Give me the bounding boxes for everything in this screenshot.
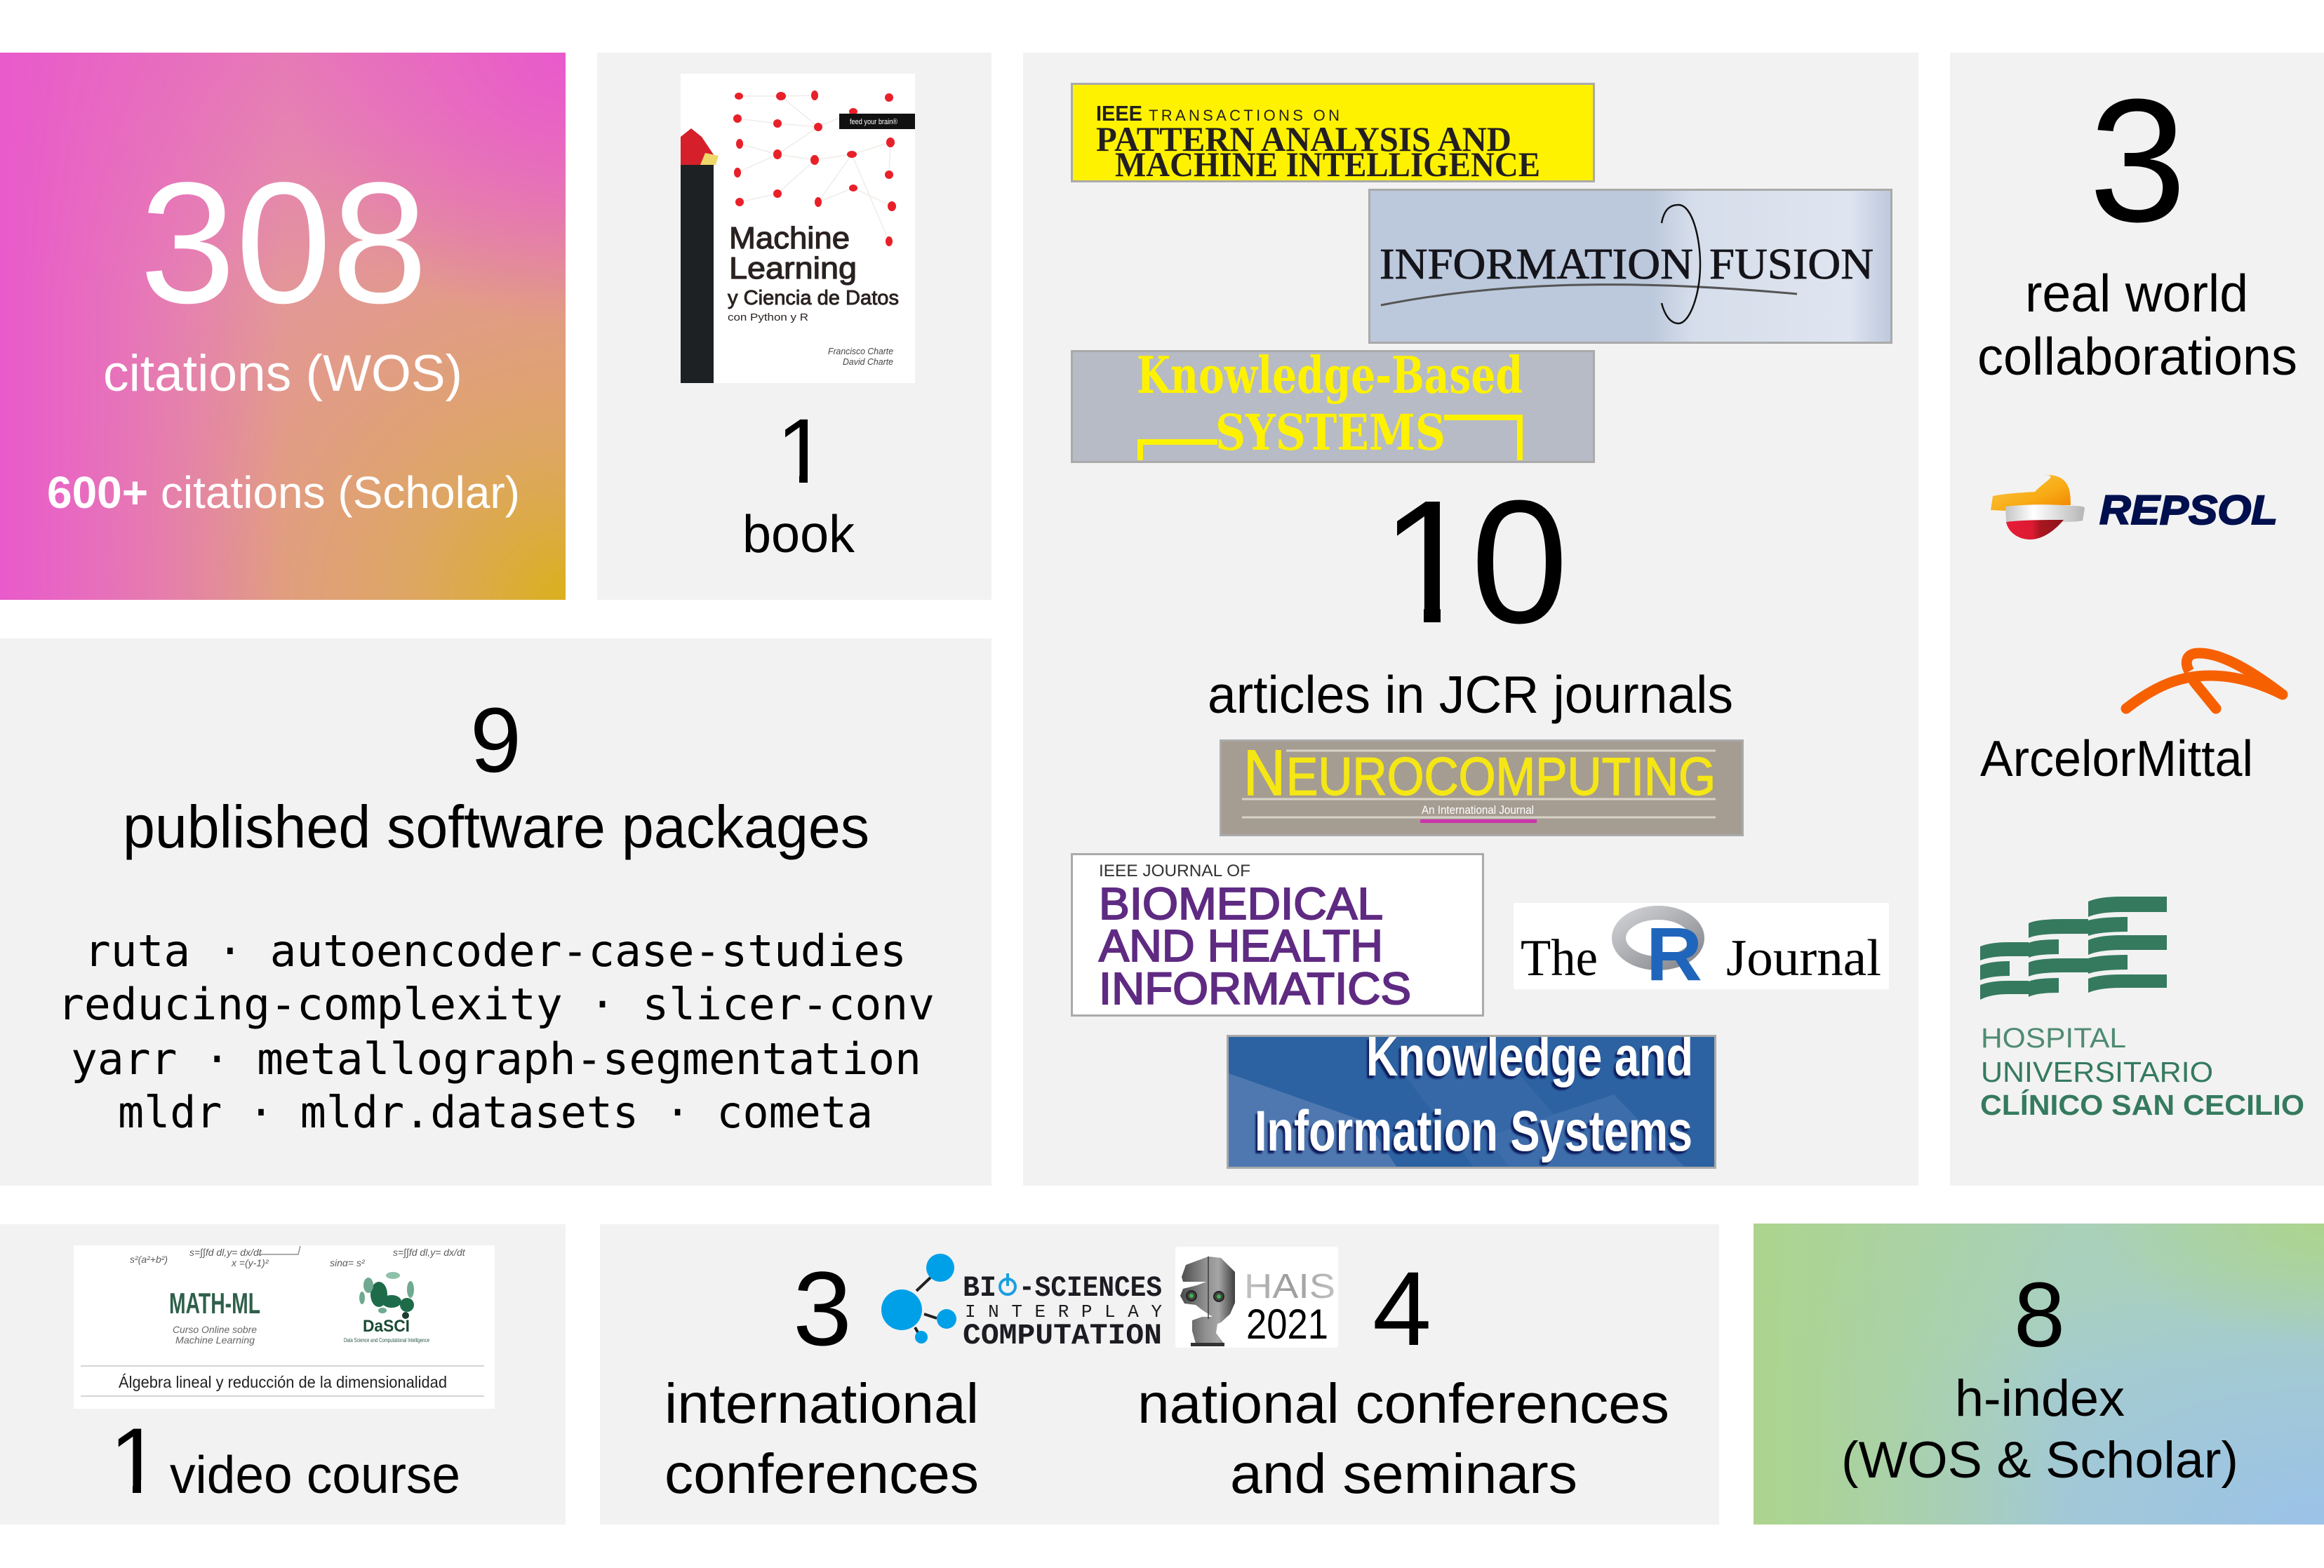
logo: Knowledge-Based Systems: SYSTEMS — [1215, 403, 1445, 462]
label: articles in JCR journals: articles in JCR journals — [1208, 665, 1733, 724]
label: h-index — [1841, 1370, 2238, 1489]
logo: IEEE TPAMI: MACHINE INTELLIGENCE — [1115, 145, 1540, 184]
video course thumbnail: DaSCI — [363, 1317, 410, 1336]
panel: real world collaborations — [1950, 53, 2324, 1186]
logo: Knowledge and Information Systems: Knowledge and — [1366, 1025, 1693, 1087]
label: citations WOS: citations (WOS) — [103, 345, 462, 402]
logo: Knowledge and Information Systems — [1228, 1025, 1715, 1167]
number: 1 book: 1 — [776, 399, 827, 502]
panel: journal articles — [1023, 53, 1918, 1186]
logo: Hospital San Cecilio: HOSPITAL — [1981, 1023, 2126, 1054]
logo: IEEE JBHI: BIOMEDICAL — [1099, 878, 1383, 929]
video course thumbnail: Álgebra lineal y reducción de la dimensionalidad — [119, 1373, 447, 1391]
book cover: Machine — [729, 221, 850, 255]
panel: h-index — [1754, 1224, 2324, 1525]
logo: The R Journal: R — [1646, 911, 1702, 996]
label: international conferences: international — [665, 1372, 979, 1435]
number: 3 international conferences: 3 — [793, 1249, 852, 1367]
number: 10 articles: 10 — [1380, 464, 1568, 659]
video course thumbnail: x =(y-1)² — [231, 1257, 269, 1268]
logo: IEEE JBHI: INFORMATICS — [1099, 963, 1411, 1014]
logo: HAIS 2021 — [1175, 1247, 1338, 1348]
logo: IEEE JBHI — [1072, 855, 1483, 1016]
logo: Repsol: REPSOL — [2099, 488, 2278, 533]
package list: yarr · metallograph-segmentation — [71, 1033, 921, 1085]
video course thumbnail: s²(a²+b²) — [130, 1254, 168, 1265]
logo: Bio-Sciences Interplay Computation: BI — [963, 1271, 996, 1305]
logo: Neurocomputing: EUROCOMPUTING — [1286, 747, 1716, 807]
logo: Knowledge-Based Systems: Knowledge-Based — [1137, 345, 1523, 405]
logo: Neurocomputing: An International Journal — [1422, 803, 1534, 817]
panel: software packages — [0, 638, 991, 1186]
label: book: book — [742, 504, 855, 563]
panel: book — [597, 53, 991, 600]
logo: Information Fusion: INFORMATION — [1380, 241, 1693, 288]
logo: IEEE TPAMI: IEEE — [1096, 101, 1142, 126]
book cover: y Ciencia de Datos — [728, 287, 899, 309]
video course thumbnail: sinα= s² — [330, 1257, 366, 1268]
logo: Hospital San Cecilio: UNIVERSITARIO — [1981, 1056, 2213, 1088]
label: real world collaborations — [1977, 264, 2297, 386]
video course thumbnail: s=∫∫fd dl,y= dx/dt — [393, 1247, 466, 1259]
video course thumbnail: Curso Online sobre — [173, 1324, 257, 1335]
heading: published software packages: published software packages — [123, 794, 869, 861]
book cover: Francisco Charte — [828, 346, 893, 356]
package list: ruta · autoencoder-case-studies — [84, 925, 907, 977]
package list: reducing-complexity · slicer-conv — [58, 979, 935, 1030]
logo: Bio-Sciences Interplay Computation: INTERPLAY — [965, 1301, 1162, 1322]
book cover: con Python y R — [728, 311, 808, 323]
logo: Hospital San Cecilio — [1980, 897, 2304, 1121]
book cover: feed your brain® — [850, 118, 897, 126]
logo: IEEE JBHI: IEEE JOURNAL OF — [1099, 862, 1250, 880]
logo: The R Journal: The — [1521, 930, 1598, 987]
number: 8 h-index: 8 — [2014, 1263, 2065, 1366]
video course thumbnail: s=∫∫fd dl,y= dx/dt — [189, 1247, 262, 1259]
label: video course: video course — [170, 1445, 460, 1504]
number: 1 video course: 1 — [109, 1409, 161, 1513]
logo: Information Fusion: FUSION — [1709, 241, 1874, 288]
logo: IEEE TPAMI: PATTERN ANALYSIS AND — [1096, 119, 1511, 159]
panel: conferences — [600, 1224, 1719, 1525]
label: international conferences: conferences — [665, 1442, 979, 1505]
logo: IEEE TPAMI: TRANSACTIONS ON — [1149, 107, 1340, 124]
logo: Neurocomputing: N — [1243, 737, 1285, 809]
label: h-index: (WOS & Scholar) — [1841, 1432, 2238, 1489]
number: 4 national conferences: 4 — [1373, 1249, 1431, 1367]
label: citations Scholar: 600+ citations (Scholar) — [47, 467, 520, 518]
label: real world collaborations: collaborations — [1977, 327, 2297, 386]
logo: Knowledge-Based Systems — [1072, 345, 1594, 462]
logo: Bio-Sciences Interplay Computation: COMPUTATION — [963, 1319, 1162, 1353]
book cover: Learning — [729, 251, 857, 286]
package list — [58, 925, 935, 1138]
logo: ArcelorMittal: ArcelorMittal — [1980, 731, 2253, 787]
label: real world collaborations: real world — [2025, 264, 2248, 323]
logo: HAIS 2021: HAIS — [1244, 1268, 1335, 1306]
label: international conferences — [665, 1372, 979, 1505]
book cover — [681, 74, 915, 383]
logo: The R Journal — [1514, 903, 1889, 996]
number: 3 collaborations: 3 — [2089, 62, 2186, 258]
logo: ArcelorMittal — [1980, 653, 2283, 787]
panel: citations — [0, 53, 566, 600]
video course thumbnail: Data Science and Computational Intelligence — [344, 1337, 429, 1343]
label: national conferences and seminars: national conferences — [1137, 1372, 1669, 1435]
logo: IEEE TPAMI — [1072, 84, 1594, 184]
logo: IEEE JBHI: AND HEALTH — [1099, 920, 1383, 971]
label: h-index: h-index — [1955, 1370, 2125, 1427]
label: national conferences and seminars — [1137, 1372, 1669, 1505]
book cover: David Charte — [843, 356, 893, 367]
panel: video course — [0, 1224, 566, 1525]
logo: Bio-Sciences Interplay Computation: -SCIENCES — [1019, 1271, 1162, 1305]
number: 308 citations: 308 — [140, 147, 427, 340]
video course thumbnail: MATH-ML — [169, 1287, 260, 1320]
package list: mldr · mldr.datasets · cometa — [118, 1087, 873, 1138]
logo: Neurocomputing — [1221, 737, 1743, 835]
video course thumbnail: Machine Learning — [175, 1334, 255, 1346]
label: national conferences and seminars: and seminars — [1230, 1442, 1577, 1505]
logo: Repsol — [1991, 475, 2278, 540]
logo: Information Fusion — [1370, 189, 1892, 342]
logo: Hospital San Cecilio: CLÍNICO SAN CECILIO — [1980, 1089, 2304, 1121]
logo: Bio-Sciences Interplay Computation — [881, 1254, 1162, 1353]
logo: HAIS 2021: 2021 — [1246, 1301, 1328, 1348]
number: 9 packages: 9 — [470, 688, 521, 791]
logo: Knowledge and Information Systems: Information Systems — [1255, 1099, 1692, 1163]
video course thumbnail — [74, 1245, 495, 1409]
logo: The R Journal: Journal — [1726, 930, 1881, 987]
